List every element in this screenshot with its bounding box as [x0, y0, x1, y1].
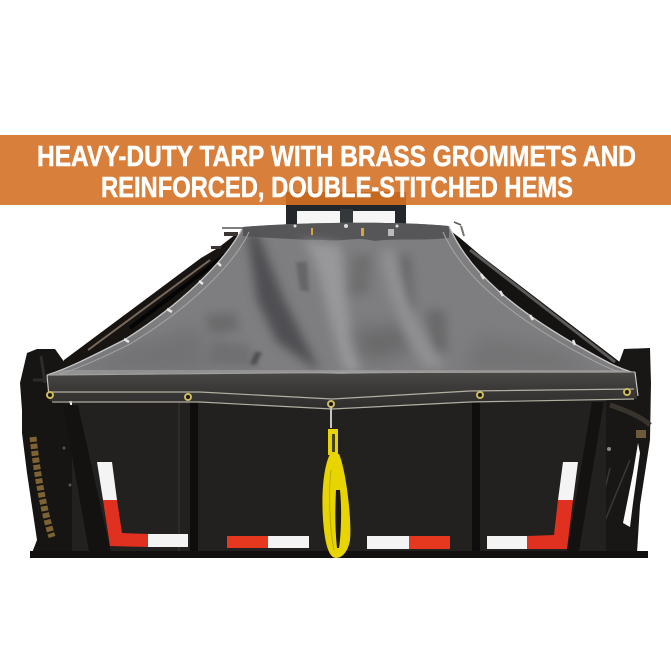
tarp upper hem	[243, 222, 449, 241]
right L-shaped reflector	[487, 462, 578, 549]
banner heading second line: REINFORCED, DOUBLE-STITCHED HEMS	[101, 172, 573, 204]
right hinge mechanism and chain	[575, 348, 651, 558]
orange banner	[0, 135, 671, 205]
product photo and banner illustration	[0, 135, 671, 558]
left L-shaped reflector	[97, 462, 188, 547]
tarp side stitching	[47, 227, 243, 375]
reinforcement tags along tarp seam	[124, 263, 575, 345]
brass grommets	[47, 389, 630, 407]
yellow bungee cord	[322, 407, 350, 558]
reinforced hem band	[47, 372, 638, 409]
hitch post behind tarp	[286, 205, 406, 225]
centre-left reflector	[227, 536, 309, 548]
trailer tailgate	[30, 396, 648, 558]
tarp	[40, 220, 640, 380]
left hinge mechanism and chain	[20, 349, 105, 558]
top hem tags	[222, 222, 461, 236]
centre-right reflector	[367, 536, 450, 549]
right trailer side rail	[452, 226, 630, 378]
left trailer side rail	[60, 232, 240, 376]
